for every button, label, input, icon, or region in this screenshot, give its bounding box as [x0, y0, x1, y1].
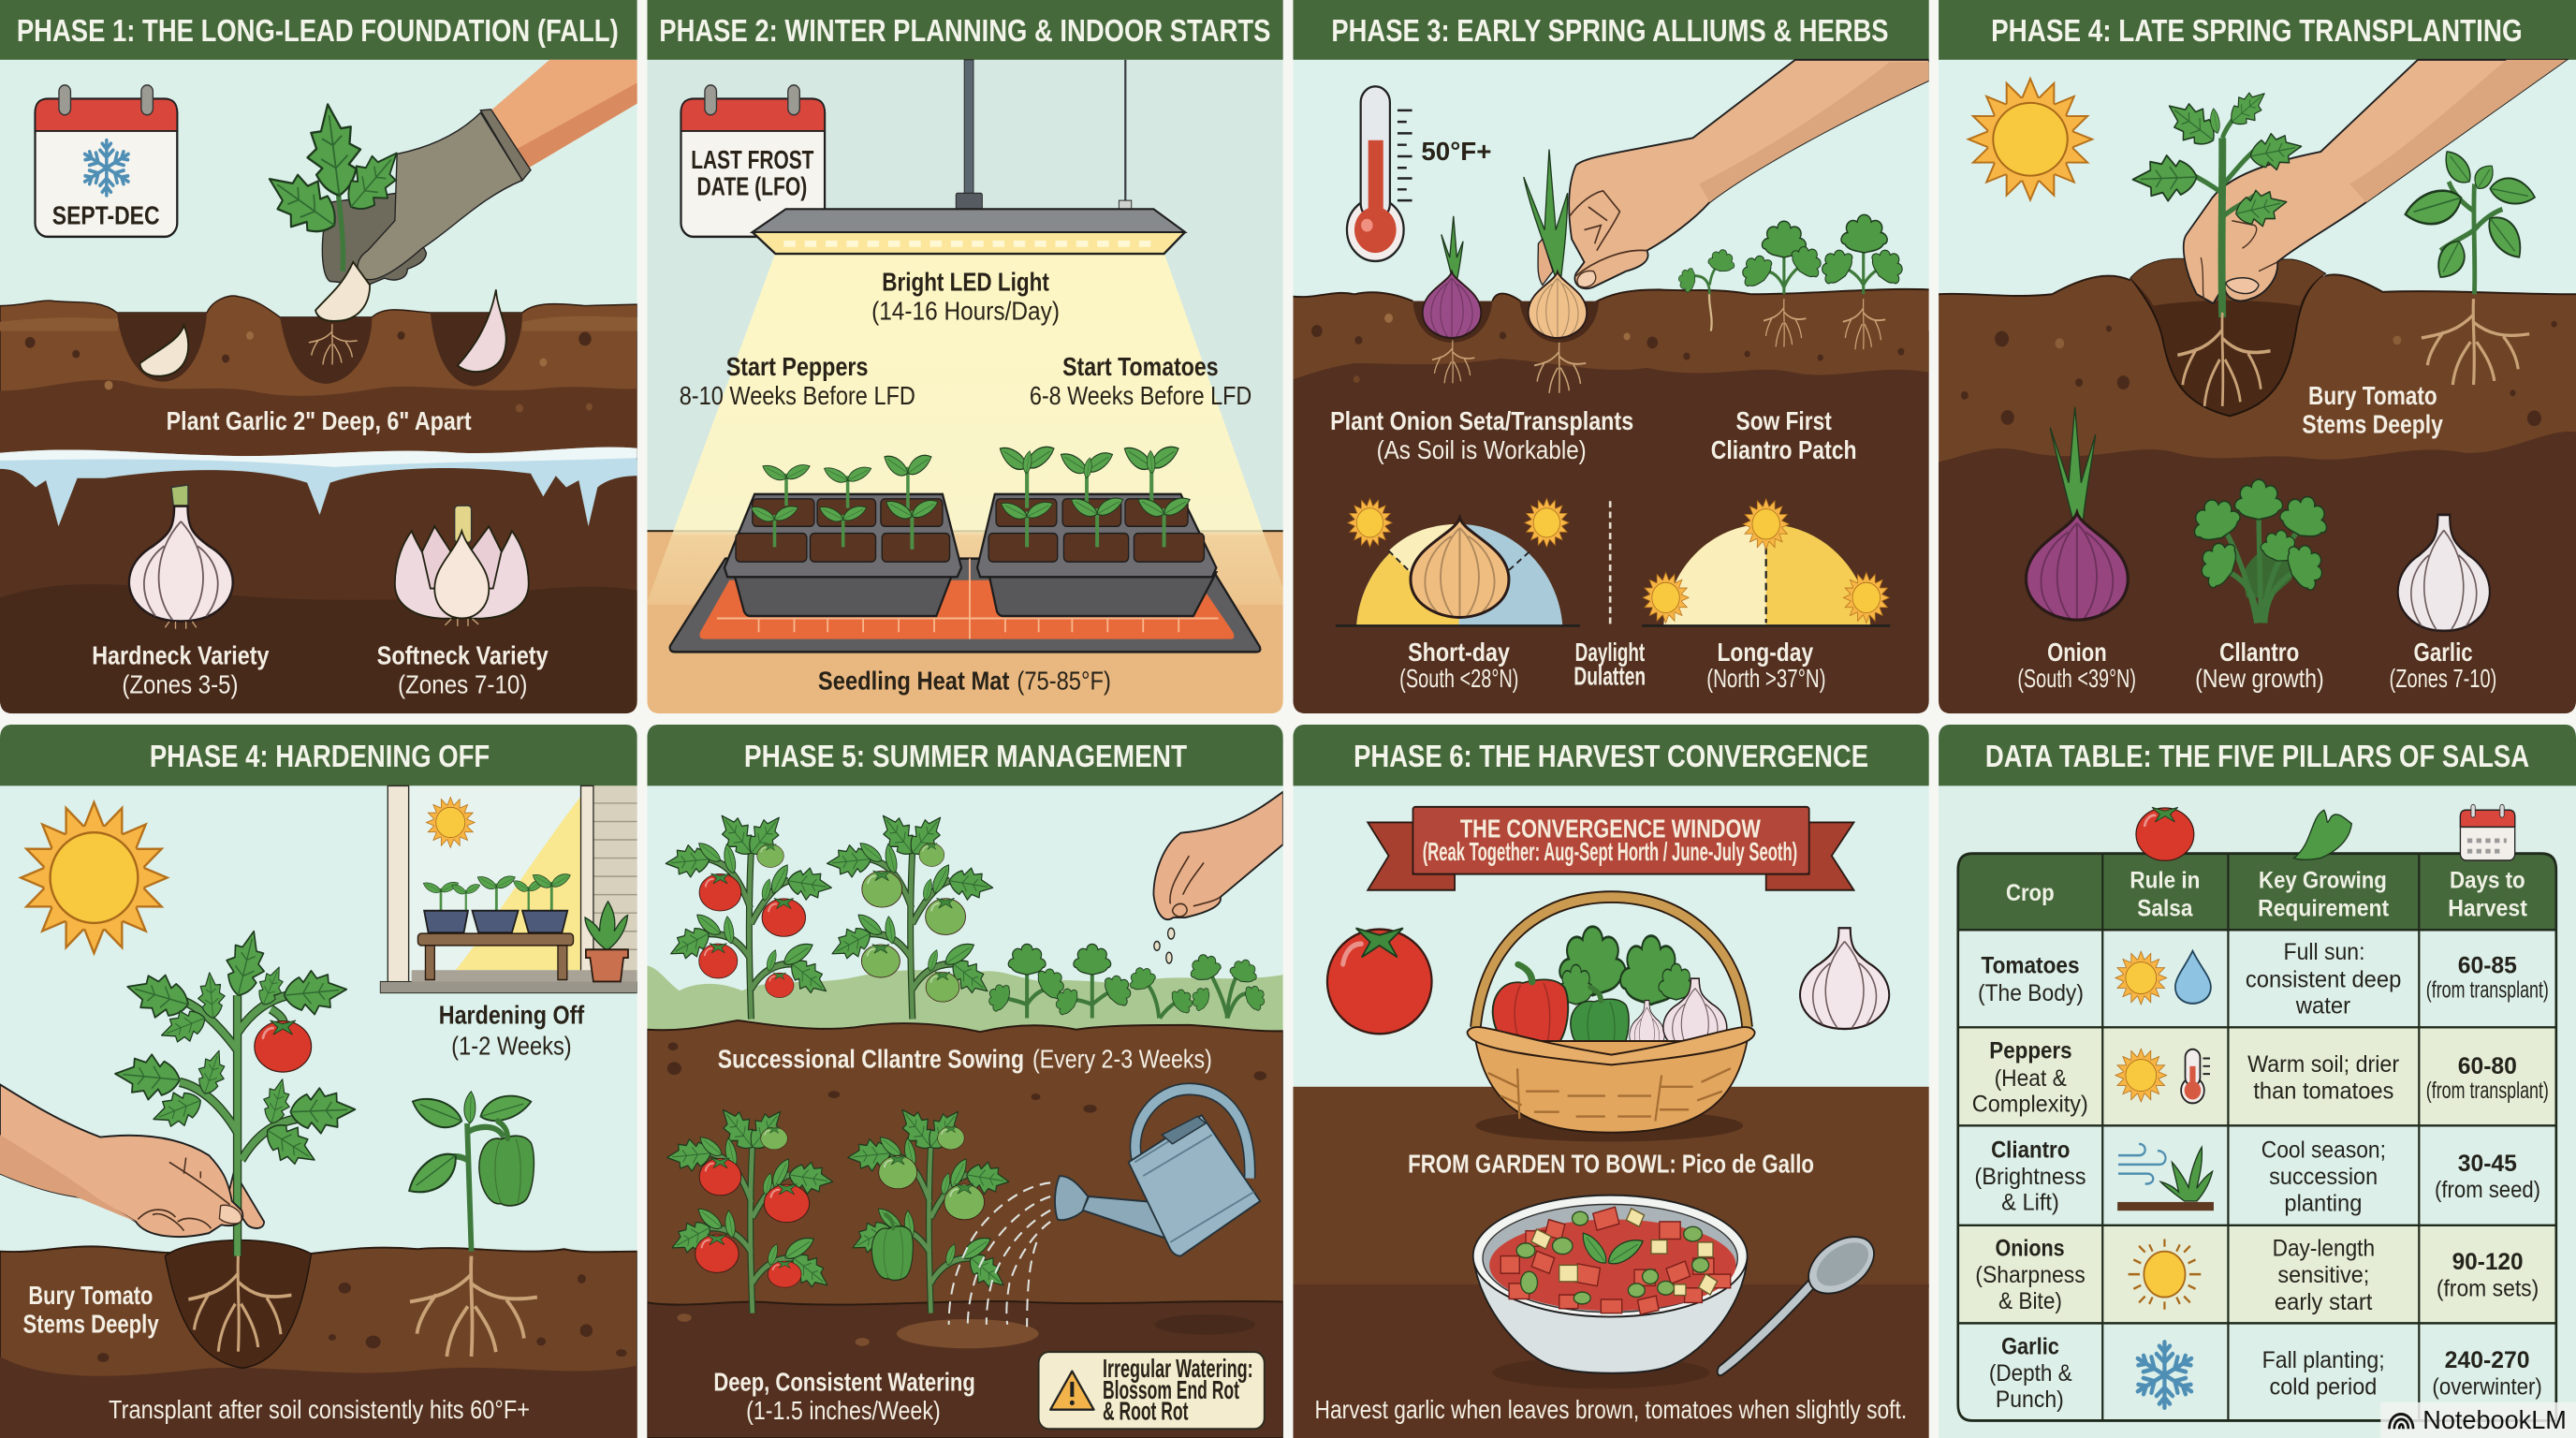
panel: phase 4 late spring transplanting — [1939, 0, 2576, 717]
banner: convergence window: (Reak Together: Aug-Sept Horth / June-July Seoth) — [1423, 837, 1797, 866]
heading: summer management: PHASE 5: SUMMER MANAGEMENT — [744, 739, 1188, 773]
panel: phase 1 long-lead foundation — [0, 0, 637, 717]
text: long-day — [1706, 638, 1826, 693]
row: cilantro: & Lift) — [2001, 1190, 2059, 1216]
callout: irregular watering warning: & Root Rot — [1103, 1396, 1189, 1426]
diagram: short-day onion dome — [1336, 498, 1580, 625]
text: softneck variety: (Zones 7-10) — [398, 669, 527, 699]
row: cilantro — [1974, 1137, 2540, 1217]
icon: garlic — [1800, 928, 1889, 1029]
text: transplant note: Transplant after soil consistently hits 60°F+ — [109, 1395, 530, 1424]
table header row: Crop — [2006, 880, 2055, 906]
heading: data table — [1939, 725, 2576, 785]
callout: irregular watering warning: Irregular Watering: — [1103, 1354, 1253, 1383]
text: cilantro label — [2195, 638, 2324, 693]
icon: hand back finger — [227, 1171, 264, 1228]
row: peppers: Peppers — [1989, 1037, 2072, 1064]
text: cilantro label: (New growth) — [2195, 664, 2324, 693]
row: garlic: Punch) — [1996, 1387, 2064, 1413]
text: onion label: Onion — [2047, 638, 2107, 667]
row: garlic — [1989, 1334, 2542, 1413]
text: deep consistent watering: Deep, Consistent Watering — [713, 1368, 975, 1397]
icon: garlic bulb — [2398, 515, 2490, 631]
text: bright LED light: Bright LED Light — [882, 267, 1049, 297]
heading: hardening off — [0, 725, 637, 785]
watermark: NotebookLM: NotebookLM — [2422, 1405, 2567, 1435]
text: bury tomato stems — [2302, 381, 2443, 439]
text: garlic label: (Zones 7-10) — [2390, 664, 2496, 693]
text: hardneck variety: (Zones 3-5) — [122, 669, 238, 699]
text: garlic label: Garlic — [2414, 638, 2473, 667]
icon: calendar last frost date — [681, 85, 825, 237]
text: daylight duration — [1574, 642, 1645, 685]
icon: bowl of pico de gallo — [1473, 1196, 1748, 1388]
icon: planted cloves — [140, 262, 506, 376]
panel: phase 3 early spring alliums and herbs — [1293, 0, 1930, 717]
table header row: Requirement — [2258, 896, 2389, 922]
row: garlic: cold period — [2270, 1374, 2377, 1401]
text: from garden to bowl: FROM GARDEN TO BOWL: Pico de Gallo — [1408, 1150, 1814, 1179]
text: bury tomato stems: Bury Tomato — [2308, 381, 2437, 410]
text: start peppers: 8-10 Weeks Before LFD — [680, 381, 915, 410]
heading: harvest convergence — [1293, 725, 1930, 785]
icon: LED grow light — [753, 60, 1185, 254]
row: cilantro: planting — [2284, 1191, 2362, 1217]
icon: thermometer 50F — [1347, 86, 1491, 261]
diagram: long-day dome — [1642, 499, 1890, 625]
text: hardneck variety — [92, 640, 270, 699]
text: long-day: Long-day — [1717, 638, 1813, 667]
callout: irregular watering warning — [1039, 1352, 1265, 1429]
icon: red onion set — [1423, 216, 1481, 383]
row: onions: (from sets) — [2437, 1276, 2539, 1302]
text: bury tomato stems — [23, 1281, 159, 1339]
text: bury tomato stems: Stems Deeply — [2302, 409, 2443, 439]
row: peppers: than tomatoes — [2253, 1078, 2393, 1105]
icon: tomato column marker — [2136, 807, 2194, 860]
panel: data table five pillars of salsa — [1939, 725, 2576, 1438]
soil cross-section — [1939, 259, 2576, 717]
text: successional cilantro sowing — [718, 1044, 1212, 1074]
icon: calendar column marker — [2460, 804, 2515, 860]
text: short-day — [1400, 642, 1518, 693]
text: daylight duration: Daylight — [1575, 638, 1645, 667]
icon: tomato plant with fruit — [113, 926, 356, 1352]
row: cilantro: Cliantro — [1991, 1137, 2070, 1164]
heading: harvest convergence: PHASE 6: THE HARVEST CONVERGENCE — [1354, 739, 1868, 773]
text: garlic label — [2390, 638, 2496, 693]
heading: phase 1: PHASE 1: THE LONG-LEAD FOUNDATION (FALL) — [17, 13, 619, 49]
row: cilantro: 30-45 — [2458, 1151, 2517, 1177]
icon: basket of produce — [1468, 897, 1755, 1141]
soil cross-section — [647, 1020, 1283, 1438]
text: long-day: (North >37°N) — [1706, 664, 1826, 693]
text: hardening off: (1-2 Weeks) — [451, 1032, 572, 1061]
row: onions: Onions — [1995, 1236, 2065, 1262]
text: start tomatoes: Start Tomatoes — [1062, 352, 1219, 381]
icon: sun — [1969, 79, 2092, 200]
panel: phase 6 harvest convergence — [1293, 725, 1930, 1438]
row: peppers: 60-80 — [2458, 1053, 2517, 1079]
text: sow first cilantro: Cliantro Patch — [1711, 435, 1857, 464]
icon: seedling heat mat — [670, 559, 1260, 652]
icon: thermometer 50F: 50°F+ — [1421, 137, 1491, 166]
heading: phase 4 transplanting — [1939, 0, 2576, 60]
text: seedling heat mat: Seedling Heat Mat — [818, 666, 1010, 696]
text: short-day: Short-day — [1408, 638, 1510, 667]
icon: hand transplanting tomato — [2132, 60, 2567, 406]
text: deep consistent watering: (1-1.5 inches/Week) — [746, 1396, 941, 1425]
icon: hand sowing seeds — [1153, 792, 1283, 963]
text: hardneck variety: Hardneck Variety — [92, 640, 270, 670]
row: tomatoes — [1978, 939, 2549, 1020]
text: onion label — [2017, 638, 2136, 693]
banner: convergence window — [1368, 807, 1853, 890]
text: plant garlic depth: Plant Garlic 2" Deep, 6" Apart — [167, 406, 472, 435]
row: tomatoes: water — [2295, 993, 2350, 1020]
row: onions: (Sharpness — [1975, 1262, 2086, 1288]
heading: summer management — [647, 725, 1284, 785]
text: sow first cilantro: Sow First — [1736, 406, 1832, 435]
row: tomatoes: Tomatoes — [1981, 953, 2080, 979]
text: deep consistent watering — [713, 1368, 975, 1425]
icon: tomato seedling tray — [977, 440, 1216, 616]
row: cilantro: (Brightness — [1974, 1164, 2086, 1190]
icon: calendar Sept-Dec — [36, 85, 177, 237]
soil cross-section — [0, 296, 637, 460]
text: cilantro label: Cllantro — [2219, 638, 2299, 667]
row: tomatoes: consistent deep — [2246, 966, 2401, 993]
table header row: Days to — [2450, 867, 2525, 894]
text: seedling heat mat — [818, 670, 1110, 695]
row: peppers — [1972, 1037, 2549, 1118]
row: onions: Day-length — [2273, 1236, 2375, 1262]
text: start peppers: Start Peppers — [726, 352, 869, 381]
row: cilantro: succession — [2269, 1164, 2378, 1190]
text: plant onion sets — [1330, 406, 1633, 464]
row: tomatoes: Full sun: — [2284, 939, 2364, 965]
text: short-day: (South <28°N) — [1399, 664, 1518, 693]
text: harvest note: Harvest garlic when leaves brown, tomatoes when slightly soft. — [1315, 1395, 1907, 1424]
text: successional cilantro sowing: (Every 2-3 Weeks) — [1032, 1044, 1212, 1074]
lower soil with frost line — [0, 448, 637, 717]
heading: phase 3 — [1293, 0, 1930, 60]
row: peppers: (Heat & — [1995, 1065, 2067, 1092]
text: start tomatoes — [1031, 358, 1251, 404]
text: hardening off: Hardening Off — [439, 1000, 584, 1030]
row: cilantro: (from seed) — [2435, 1177, 2540, 1203]
row: garlic: (Depth & — [1989, 1360, 2072, 1387]
icon: hand planting onion — [1524, 60, 1929, 393]
text: bright LED light: (14-16 Hours/Day) — [871, 296, 1060, 326]
icon: calendar Sept-Dec: SEPT-DEC — [52, 201, 160, 230]
text: onion label: (South <39°N) — [2017, 664, 2136, 693]
icon: pepper column marker — [2294, 810, 2351, 859]
row: onions — [1975, 1236, 2539, 1316]
table header row — [1958, 854, 2556, 930]
icon: calendar last frost date: DATE (LFO) — [696, 172, 807, 201]
heading: phase 3: PHASE 3: EARLY SPRING ALLIUMS & HERBS — [1331, 13, 1889, 49]
heading: hardening off: PHASE 4: HARDENING OFF — [150, 739, 490, 773]
row: peppers: Complexity) — [1972, 1092, 2088, 1118]
text: softneck variety — [377, 640, 549, 699]
table header row: Harvest — [2448, 896, 2527, 922]
heading: phase 4 transplanting: PHASE 4: LATE SPRING TRANSPLANTING — [1991, 13, 2523, 49]
text: plant onion sets: Plant Onion Seta/Transplants — [1330, 406, 1633, 435]
icon: hardneck garlic — [129, 485, 233, 629]
icon: pepper seedling tray — [724, 449, 961, 616]
light cone — [647, 253, 1283, 607]
row: garlic: Fall planting; — [2262, 1347, 2385, 1374]
text: hardening off — [439, 1000, 584, 1061]
icon: cilantro seedlings — [1676, 214, 1910, 349]
icon: hand holding plant — [0, 1084, 242, 1237]
icon: pepper plant — [2402, 146, 2537, 385]
text: bury tomato stems: Stems Deeply — [23, 1310, 159, 1339]
text: successional cilantro sowing: Successional Cllantre Sowing — [718, 1044, 1024, 1074]
heading: data table: DATA TABLE: THE FIVE PILLARS OF SALSA — [1985, 738, 2529, 773]
heading: phase 1 — [0, 0, 637, 60]
icon: red onion — [2027, 407, 2128, 620]
icon: sun — [21, 802, 168, 953]
row: tomatoes: 60-85 — [2458, 953, 2517, 979]
icon: cilantro bunch — [2187, 479, 2333, 623]
icon: softneck garlic — [395, 506, 529, 626]
heading: phase 2 — [647, 0, 1284, 60]
row: tomatoes: (The Body) — [1978, 980, 2084, 1006]
text: bright LED light — [871, 267, 1060, 326]
soil cross-section — [1293, 289, 1930, 717]
panel: phase 4 hardening off — [0, 725, 637, 1438]
row: cilantro: Cool season; — [2261, 1137, 2386, 1164]
text: plant onion sets: (As Soil is Workable) — [1377, 435, 1587, 464]
divider: daylight duration — [1608, 501, 1612, 624]
background hedge — [647, 965, 1283, 1036]
row: garlic: (overwinter) — [2432, 1374, 2542, 1401]
text: start tomatoes: 6-8 Weeks Before LFD — [1030, 381, 1251, 410]
icon: tomato — [1327, 928, 1432, 1034]
watermark: NotebookLM — [2380, 1402, 2576, 1438]
inset: porch with pots hardening off — [380, 785, 637, 993]
table header row: Rule in — [2130, 867, 2200, 894]
soil cross-section — [0, 1240, 637, 1438]
text: sow first cilantro — [1711, 411, 1855, 459]
icon: pepper plant with fruit — [402, 1089, 537, 1357]
row: onions: early start — [2275, 1289, 2373, 1316]
icon: lower tomato plants — [666, 1099, 1011, 1313]
icon: cilantro row — [984, 944, 1269, 1019]
table header row: Key Growing — [2259, 867, 2387, 894]
icon: gloved hand planting garlic — [256, 60, 637, 285]
banner: convergence window: THE CONVERGENCE WINDOW — [1460, 814, 1761, 844]
row: onions: 90-120 — [2452, 1249, 2524, 1276]
heading: phase 2: PHASE 2: WINTER PLANNING & INDOOR STARTS — [659, 13, 1270, 49]
text: softneck variety: Softneck Variety — [377, 640, 549, 670]
table header row: Salsa — [2137, 896, 2193, 922]
row: garlic: Garlic — [2001, 1334, 2059, 1360]
row: onions: & Bite) — [1998, 1288, 2062, 1315]
icon: spoon — [1718, 1225, 1883, 1375]
panel: phase 2 winter planning — [647, 0, 1284, 715]
text: start peppers — [680, 358, 915, 404]
icon: calendar last frost date: LAST FROST — [691, 145, 813, 175]
text: seedling heat mat: (75-85°F) — [1017, 666, 1111, 696]
table — [1958, 854, 2556, 1420]
icon: watering can with spray — [949, 1089, 1260, 1329]
row: garlic: 240-270 — [2445, 1347, 2530, 1374]
text: daylight duration: Dulatten — [1573, 662, 1646, 691]
row: peppers: Warm soil; drier — [2247, 1051, 2399, 1078]
panel: phase 5 summer management — [647, 725, 1284, 1438]
text: bury tomato stems: Bury Tomato — [28, 1281, 153, 1310]
icon: upper tomato plants — [665, 805, 995, 1020]
callout: irregular watering warning: Blossom End Rot — [1103, 1375, 1239, 1404]
row: onions: sensitive; — [2277, 1262, 2369, 1288]
